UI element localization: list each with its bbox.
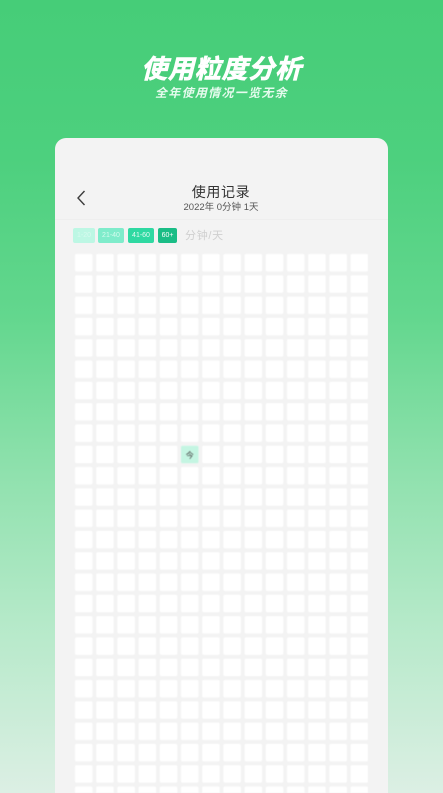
today cell: 今: [186, 450, 194, 460]
legend chip 60+: [158, 228, 177, 243]
screen heading: 使用记录: [192, 184, 250, 200]
legend chip 41-60: 41-60: [132, 232, 150, 239]
yearly summary: 2022年 0分钟 1天: [184, 202, 258, 213]
legend chip 41-60: [128, 228, 154, 243]
calendar grid: [76, 254, 368, 792]
legend chip 21-40: [98, 228, 124, 243]
legend: minutes per day: [73, 228, 224, 243]
subtitle: 全年使用情况一览无余: [155, 86, 288, 100]
title: 使用粒度分析: [141, 54, 302, 84]
back arrow icon: [77, 190, 85, 206]
legend chip 60+: 60+: [162, 232, 173, 239]
legend chip 1-20: [73, 228, 95, 243]
panel: usage record card: [55, 138, 388, 793]
today cell: [181, 446, 198, 463]
legend unit: 分钟/天: [185, 230, 224, 242]
legend chip 21-40: 21-40: [102, 232, 120, 239]
legend chip 1-20: 1-20: [77, 232, 91, 239]
